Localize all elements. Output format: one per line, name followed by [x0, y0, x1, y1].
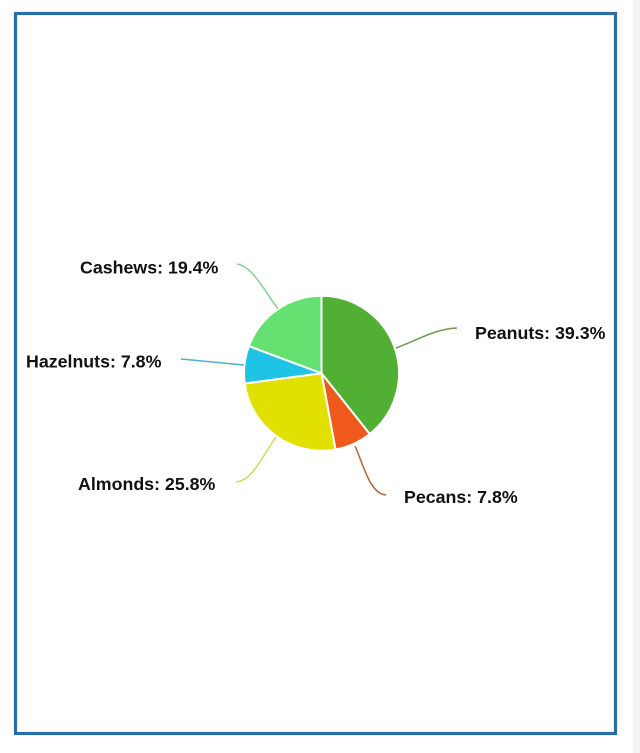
- leader line: almonds: [236, 437, 276, 482]
- slice: hazelnuts: [244, 346, 322, 384]
- label: pecans: Pecans: 7.8%: [404, 487, 518, 507]
- label: peanuts: Peanuts: 39.3%: [475, 323, 606, 343]
- leader line: cashews: [237, 264, 278, 309]
- leader line: hazelnuts: [181, 359, 244, 365]
- slice: pecans: [322, 373, 370, 450]
- slice: peanuts: [322, 296, 399, 434]
- pie chart: [244, 296, 399, 451]
- leader line: peanuts: [396, 328, 457, 348]
- leader line: pecans: [355, 446, 386, 495]
- label: hazelnuts: Hazelnuts: 7.8%: [26, 352, 162, 372]
- slice: almonds: [245, 373, 336, 451]
- slice: cashews: [249, 296, 322, 373]
- label: almonds: Almonds: 25.8%: [78, 474, 216, 494]
- label: cashews: Cashews: 19.4%: [80, 258, 219, 278]
